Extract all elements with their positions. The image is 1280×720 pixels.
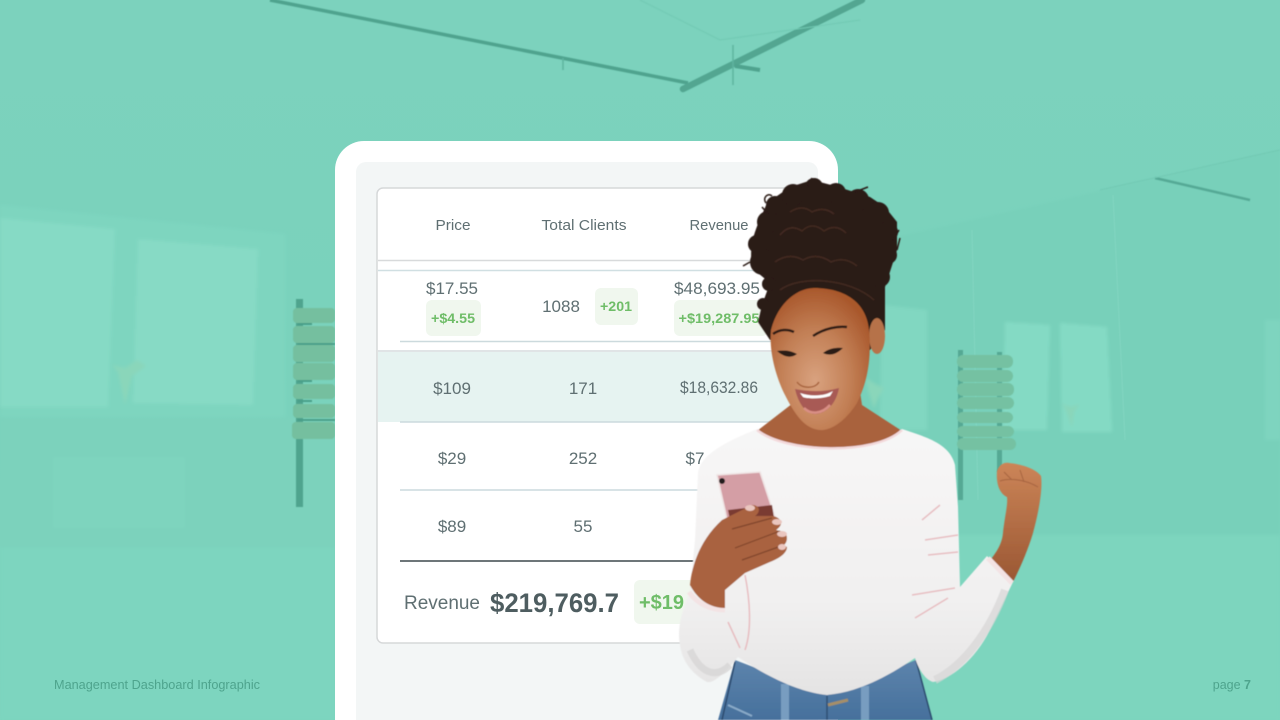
nose bbox=[797, 382, 819, 387]
tablet frame bbox=[335, 141, 838, 720]
row 2: 171 bbox=[569, 379, 597, 398]
table header: Price bbox=[436, 217, 470, 234]
row 1: $17.55 bbox=[426, 279, 478, 298]
row 3: $7 bbox=[686, 449, 704, 468]
row 4: 55 bbox=[574, 517, 592, 536]
footer title: Management Dashboard Infographic bbox=[54, 678, 260, 692]
right wall and windows bbox=[838, 150, 1280, 720]
row 3: $29 bbox=[438, 449, 466, 468]
revenue total bbox=[404, 580, 704, 624]
face bbox=[771, 288, 870, 430]
eyebrows bbox=[773, 327, 847, 336]
table header: Total Clients bbox=[542, 217, 626, 234]
towel rack right bbox=[957, 350, 1016, 500]
person celebrating with phone bbox=[679, 178, 1041, 720]
row 2: $109 bbox=[433, 379, 471, 398]
row 1 bbox=[426, 279, 768, 336]
table header: Revenue bbox=[690, 217, 748, 234]
neck bbox=[757, 365, 902, 449]
jeans bbox=[718, 660, 932, 720]
phone bbox=[717, 472, 778, 560]
revenue total: +$19 bbox=[639, 592, 684, 614]
mouth bbox=[795, 388, 839, 414]
row 1: +$4.55 bbox=[431, 311, 476, 326]
row 1: +201 bbox=[600, 299, 633, 314]
right forearm and fist bbox=[985, 463, 1041, 582]
row 2: $18,632.86 bbox=[680, 378, 758, 397]
highlighted row bbox=[378, 352, 801, 422]
tablet screen bbox=[356, 162, 818, 720]
eyes bbox=[777, 348, 843, 357]
row 1: +$19,287.95 bbox=[678, 311, 760, 326]
row 4 bbox=[438, 517, 592, 536]
ear bbox=[869, 318, 885, 354]
row 4: $89 bbox=[438, 517, 466, 536]
table header bbox=[436, 217, 748, 234]
shirt bbox=[679, 429, 1013, 695]
row 3 bbox=[438, 449, 704, 468]
left hand and forearm bbox=[690, 505, 787, 608]
shirt folds bbox=[728, 505, 958, 650]
row 1: $48,693.95 bbox=[674, 279, 760, 298]
row 2 bbox=[433, 378, 758, 398]
revenue total: $219,769.7 bbox=[490, 588, 619, 618]
data table bbox=[377, 188, 802, 643]
row 1: 1088 bbox=[542, 297, 580, 316]
row 3: 252 bbox=[569, 449, 597, 468]
ceiling rails bbox=[270, 0, 1280, 500]
page number: page 7 bbox=[1213, 678, 1251, 692]
hair bbox=[743, 178, 900, 350]
plants bbox=[112, 360, 1080, 428]
left wall and floor bbox=[0, 418, 335, 720]
left window bbox=[0, 205, 285, 417]
towel rack left bbox=[292, 299, 335, 507]
revenue total: Revenue bbox=[404, 593, 480, 614]
